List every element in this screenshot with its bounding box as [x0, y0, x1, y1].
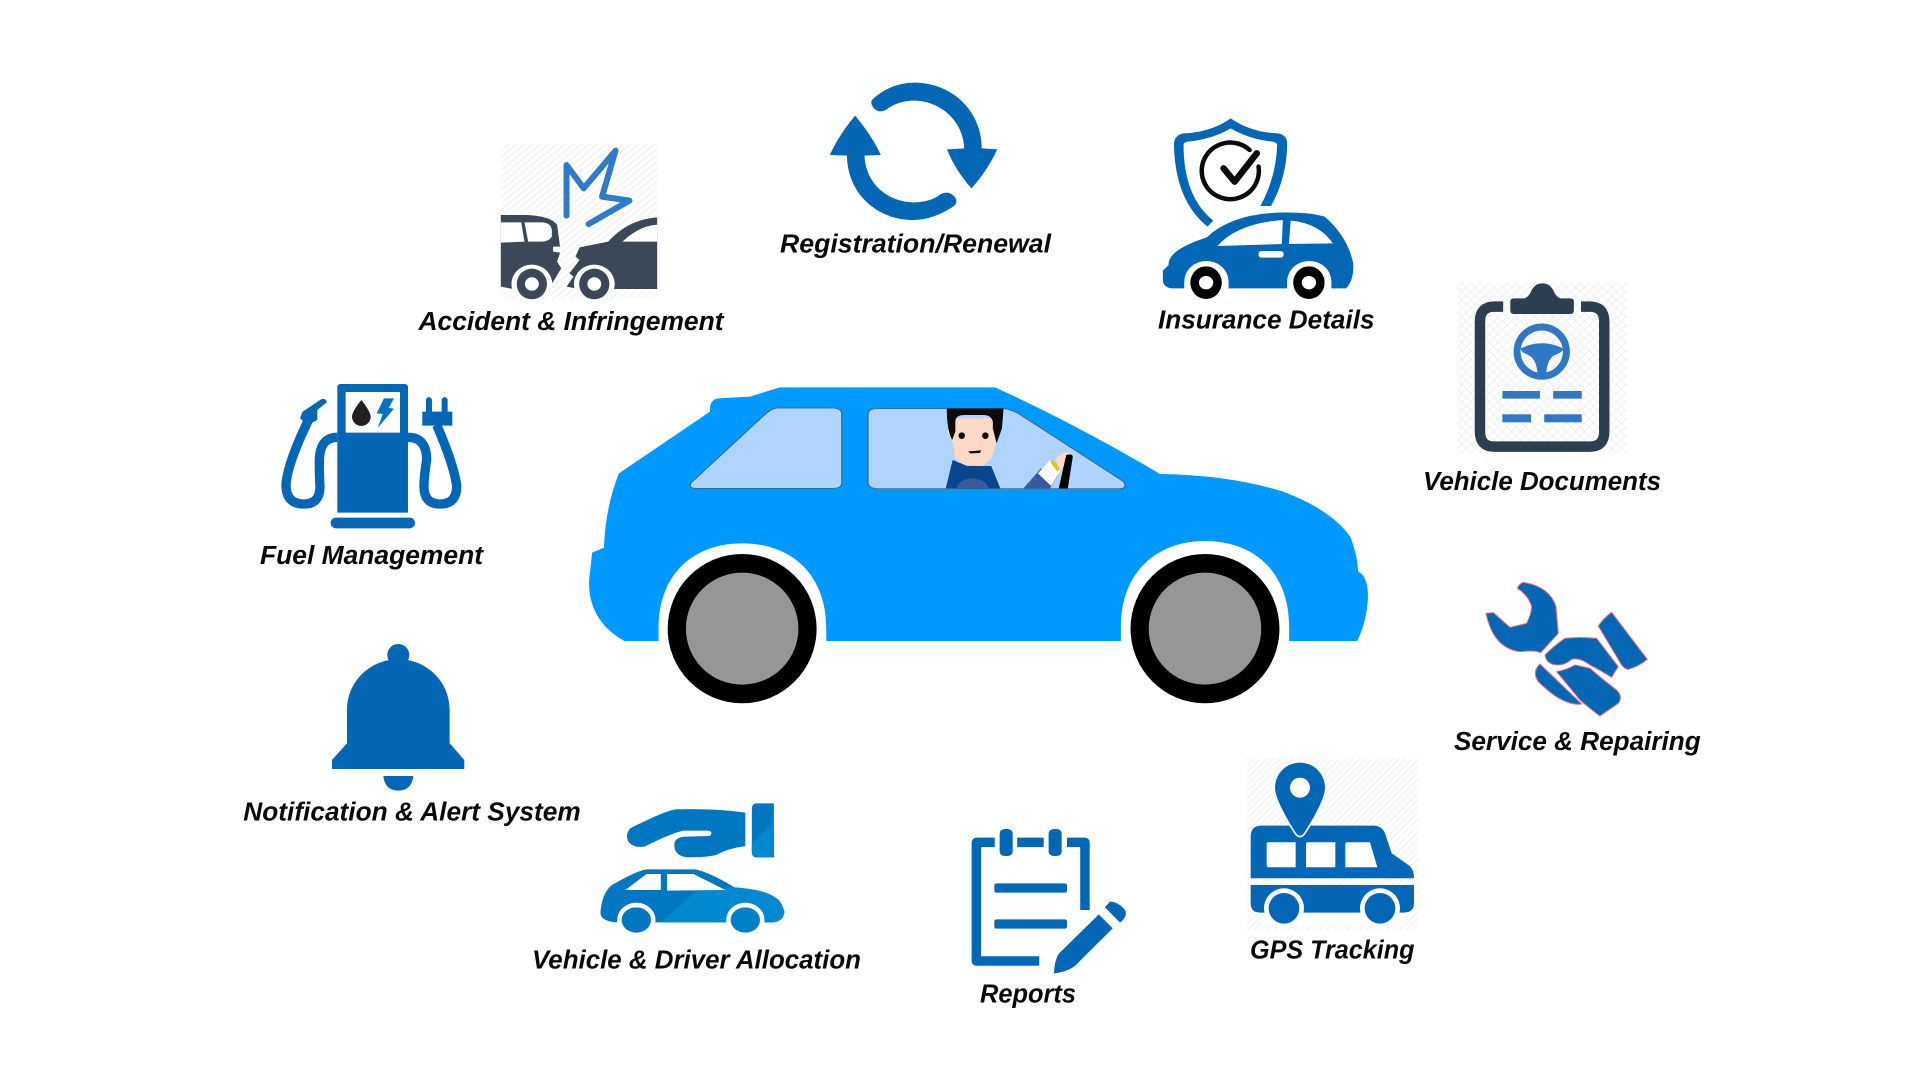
label: Service & Repairing [1454, 728, 1701, 756]
rear wheel [668, 554, 817, 703]
rear window [690, 408, 842, 488]
panel: insurance details [1158, 118, 1374, 334]
wheel arches [659, 541, 1289, 643]
label: Insurance Details [1158, 306, 1374, 334]
icon: bell [332, 644, 464, 791]
panel: vehicle and driver allocation [532, 803, 861, 974]
label: Reports [980, 981, 1076, 1009]
panel: vehicle documents [1423, 283, 1661, 496]
panel: service and repairing [1454, 582, 1701, 756]
label: Vehicle Documents [1423, 468, 1661, 496]
icon: hand over car [600, 803, 785, 937]
icon: wrench and handshake [1486, 582, 1647, 716]
driver [946, 408, 1073, 488]
label: Accident & Infringement [417, 308, 725, 336]
panel: reports [976, 829, 1126, 1009]
label: Fuel Management [260, 542, 485, 570]
front wheel [1131, 554, 1279, 703]
label: GPS Tracking [1250, 936, 1415, 964]
car body [589, 387, 1368, 641]
central car illustration [589, 387, 1368, 703]
panel: fuel management [260, 384, 485, 570]
icon: shield and car [1163, 118, 1353, 299]
label: Notification & Alert System [243, 799, 581, 827]
panel: accident and infringement [417, 144, 725, 336]
panel: gps tracking [1247, 758, 1418, 964]
label: Registration/Renewal [780, 231, 1052, 259]
icon: notepad and pen [976, 829, 1126, 973]
front window [868, 409, 1125, 489]
icon: car crash [501, 144, 658, 303]
panel: registration and renewal [780, 83, 1052, 259]
panel: notification and alert system [243, 644, 581, 827]
icon: clipboard with steering wheel [1458, 283, 1626, 453]
icon: bus with location pin [1247, 758, 1418, 930]
icon: fuel pump with plug [286, 384, 457, 528]
label: Vehicle & Driver Allocation [532, 946, 861, 974]
icon: circular arrows [830, 83, 997, 220]
